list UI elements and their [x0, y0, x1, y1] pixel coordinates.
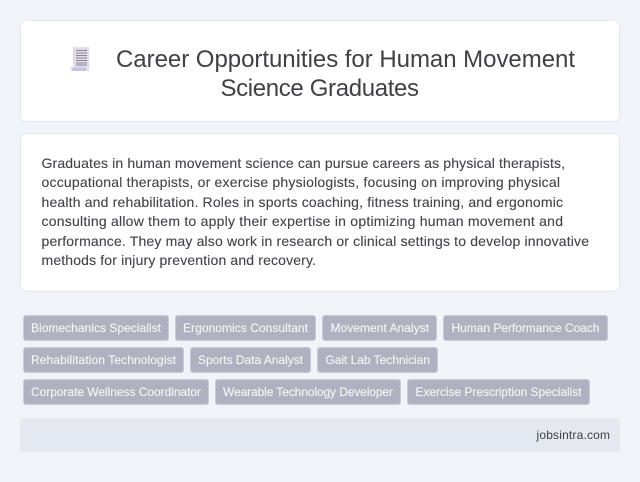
footer [20, 418, 620, 452]
tag [216, 380, 400, 404]
tag: Corporate Wellness Coordinator [31, 385, 201, 399]
text block: description: health and rehabilitation. Roles in sports coaching, fitness training, and ergonomic [42, 194, 563, 210]
tag [176, 316, 316, 340]
tag [408, 380, 590, 404]
tag: Sports Data Analyst [198, 353, 304, 367]
tag [318, 348, 438, 372]
text block: description: Graduates in human movement science can pursue careers as physical therapists, [42, 155, 565, 171]
tag: Wearable Technology Developer [223, 385, 393, 399]
title: Science Graduates [220, 75, 419, 102]
tag [444, 316, 608, 340]
tag [322, 316, 436, 340]
tag: Ergonomics Consultant [183, 321, 309, 335]
panel: header [20, 20, 620, 122]
text block: description: methods for injury prevention and recovery. [42, 252, 316, 268]
tag [190, 348, 310, 372]
title [116, 46, 575, 102]
text block: description: occupational therapists, or exercise physiologists, focusing on improving physical [42, 174, 560, 190]
tag [24, 348, 184, 372]
icon: document scroll [71, 47, 89, 71]
text block: description [42, 155, 589, 268]
tag: Human Performance Coach [452, 321, 600, 335]
tags [24, 316, 608, 404]
panel: description [20, 134, 620, 291]
title: Career Opportunities for Human Movement [116, 46, 575, 73]
tag: Movement Analyst [330, 321, 430, 335]
tag: Exercise Prescription Specialist [416, 385, 582, 399]
tag: Rehabilitation Technologist [31, 353, 177, 367]
text block: description: performance. They may also work in research or clinical settings to develop innovative [42, 233, 589, 249]
footer: jobsintra.com [536, 428, 610, 442]
tag: Gait Lab Technician [326, 353, 430, 367]
tag [24, 316, 168, 340]
text block: description: consulting allow them to apply their expertise in optimizing human movement and [42, 213, 563, 229]
tag: Biomechanics Specialist [31, 321, 162, 335]
tag [24, 380, 208, 404]
